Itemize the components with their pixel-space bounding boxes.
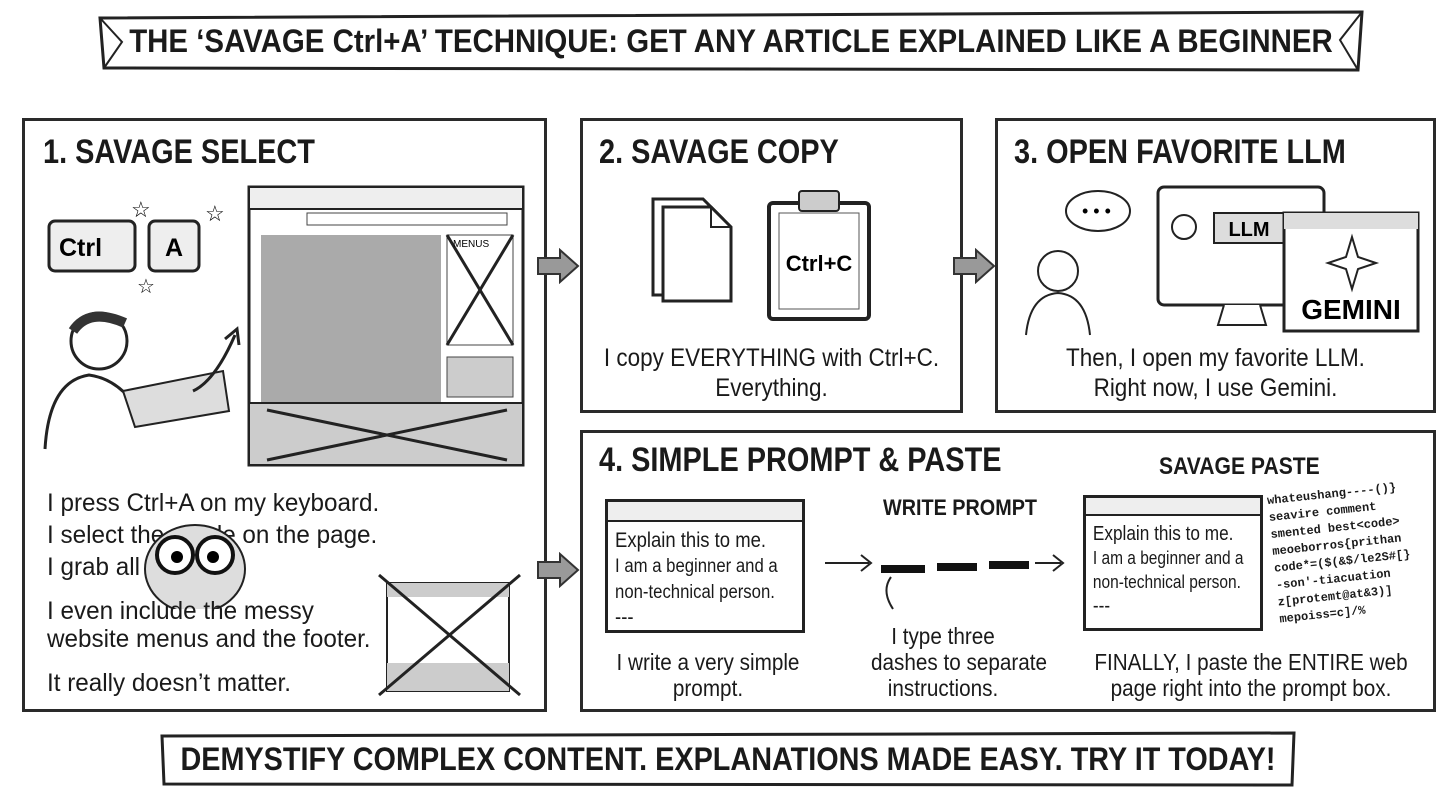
prompt window 2: non-technical person. xyxy=(1093,572,1241,592)
text paste caption xyxy=(1094,649,1408,701)
icon: thinking person xyxy=(1025,190,1131,336)
text block 2 xyxy=(47,597,371,653)
title banner: THE ‘SAVAGE Ctrl+A’ TECHNIQUE: GET ANY ARTICLE EXPLAINED LIKE A BEGINNER xyxy=(129,23,1333,59)
icon: keys Ctrl A: ☆ xyxy=(205,201,225,226)
prompt window 1: non-technical person. xyxy=(615,582,775,603)
arrow 1 to 2 xyxy=(537,248,580,284)
icon: crossed web page xyxy=(378,574,521,696)
heading 4: 4. SIMPLE PROMPT & PASTE xyxy=(599,441,1002,479)
prompt window 1: I am a beginner and a xyxy=(615,556,778,577)
icon: browser with crossed menus: MENUS xyxy=(453,239,489,250)
text block 2: website menus and the footer. xyxy=(47,625,371,653)
owl xyxy=(144,524,246,609)
text block LLM xyxy=(1066,344,1365,402)
arrow xyxy=(192,326,240,392)
prompt window 1: Explain this to me. xyxy=(615,529,766,552)
label write prompt: WRITE PROMPT xyxy=(883,495,1037,520)
text dashes caption: instructions. xyxy=(888,675,998,701)
text paste caption: FINALLY, I paste the ENTIRE web xyxy=(1094,649,1408,675)
text prompt caption xyxy=(617,649,799,701)
icon: clipboard Ctrl+C xyxy=(767,190,871,321)
text dashes caption: I type three xyxy=(891,623,995,649)
icon: monitor LLM and Gemini window: LLM xyxy=(1228,219,1270,241)
arrow and dashes xyxy=(825,554,1064,610)
heading 3: 3. OPEN FAVORITE LLM xyxy=(1014,133,1346,171)
prompt window 2 xyxy=(1083,495,1263,631)
pasted code scribble: code*=($(&$/le2S#[} xyxy=(1274,548,1411,576)
text dashes caption xyxy=(871,623,1047,701)
panel: 2 savage copy xyxy=(580,118,963,413)
label savage paste: SAVAGE PASTE xyxy=(1159,453,1320,480)
prompt window 2: Explain this to me. xyxy=(1093,523,1233,545)
heading 2: 2. SAVAGE COPY xyxy=(599,133,839,171)
icon: monitor LLM and Gemini window xyxy=(1156,186,1420,332)
panel: 3 open favorite LLM xyxy=(995,118,1436,413)
pasted code scribble: smented best<code> xyxy=(1270,514,1400,542)
text block 3: It really doesn’t matter. xyxy=(47,669,291,697)
icon: thinking person: • • • xyxy=(1082,201,1111,221)
icon: person typing xyxy=(44,312,230,450)
text block LLM: Right now, I use Gemini. xyxy=(1094,374,1337,402)
icon: monitor LLM and Gemini window: GEMINI xyxy=(1301,294,1401,325)
icon: keys Ctrl A: Ctrl xyxy=(59,234,102,262)
text prompt caption: I write a very simple xyxy=(617,649,799,675)
text block 1: I grab all xyxy=(47,553,140,581)
text block 1: I select the article on the page. xyxy=(47,521,377,549)
icon: clipboard Ctrl+C: Ctrl+C xyxy=(786,251,852,276)
pasted code scribble: seavire comment xyxy=(1268,500,1377,525)
icon: keys Ctrl A: A xyxy=(165,234,183,262)
pasted code scribble xyxy=(1266,481,1411,626)
title banner xyxy=(98,10,1364,72)
icon: documents xyxy=(652,198,732,302)
text block 1 xyxy=(47,489,379,581)
pasted code scribble: whateushang----()} xyxy=(1266,481,1397,508)
prompt window 2: I am a beginner and a xyxy=(1093,548,1243,568)
icon: keys Ctrl A: ☆ xyxy=(137,276,155,298)
panel: 4 simple prompt & paste xyxy=(580,430,1436,712)
text block copy: I copy EVERYTHING with Ctrl+C. xyxy=(604,344,939,372)
prompt window 1 xyxy=(605,499,805,633)
pasted code scribble: z[protemt@at&3)] xyxy=(1277,584,1393,610)
text dashes caption: dashes to separate xyxy=(871,649,1047,675)
pasted code scribble: meoeborros{prithan xyxy=(1272,531,1402,559)
prompt window 1: --- xyxy=(615,606,634,629)
text paste caption: page right into the prompt box. xyxy=(1111,675,1391,701)
text block copy: Everything. xyxy=(715,374,828,402)
bottom banner xyxy=(160,732,1296,786)
icon: browser with crossed menus xyxy=(248,186,524,466)
text block 2: I even include the messy xyxy=(47,597,314,625)
pasted code scribble: -son'-tiacuation xyxy=(1275,567,1391,593)
text block copy xyxy=(604,344,939,402)
arrow 1 to 4 xyxy=(537,552,580,588)
bottom banner: DEMYSTIFY COMPLEX CONTENT. EXPLANATIONS MADE EASY. TRY IT TODAY! xyxy=(180,741,1276,777)
text block LLM: Then, I open my favorite LLM. xyxy=(1066,344,1365,372)
panel: 1 savage select xyxy=(22,118,547,712)
arrow 2 to 3 xyxy=(953,248,995,284)
icon: keys Ctrl A: ☆ xyxy=(131,197,151,222)
heading 1: 1. SAVAGE SELECT xyxy=(43,133,315,171)
icon: keys Ctrl A xyxy=(48,197,225,298)
prompt window 2: --- xyxy=(1093,595,1110,617)
pasted code scribble: mepoiss=c]/% xyxy=(1279,604,1366,626)
text prompt caption: prompt. xyxy=(673,675,743,701)
text block 1: I press Ctrl+A on my keyboard. xyxy=(47,489,379,517)
